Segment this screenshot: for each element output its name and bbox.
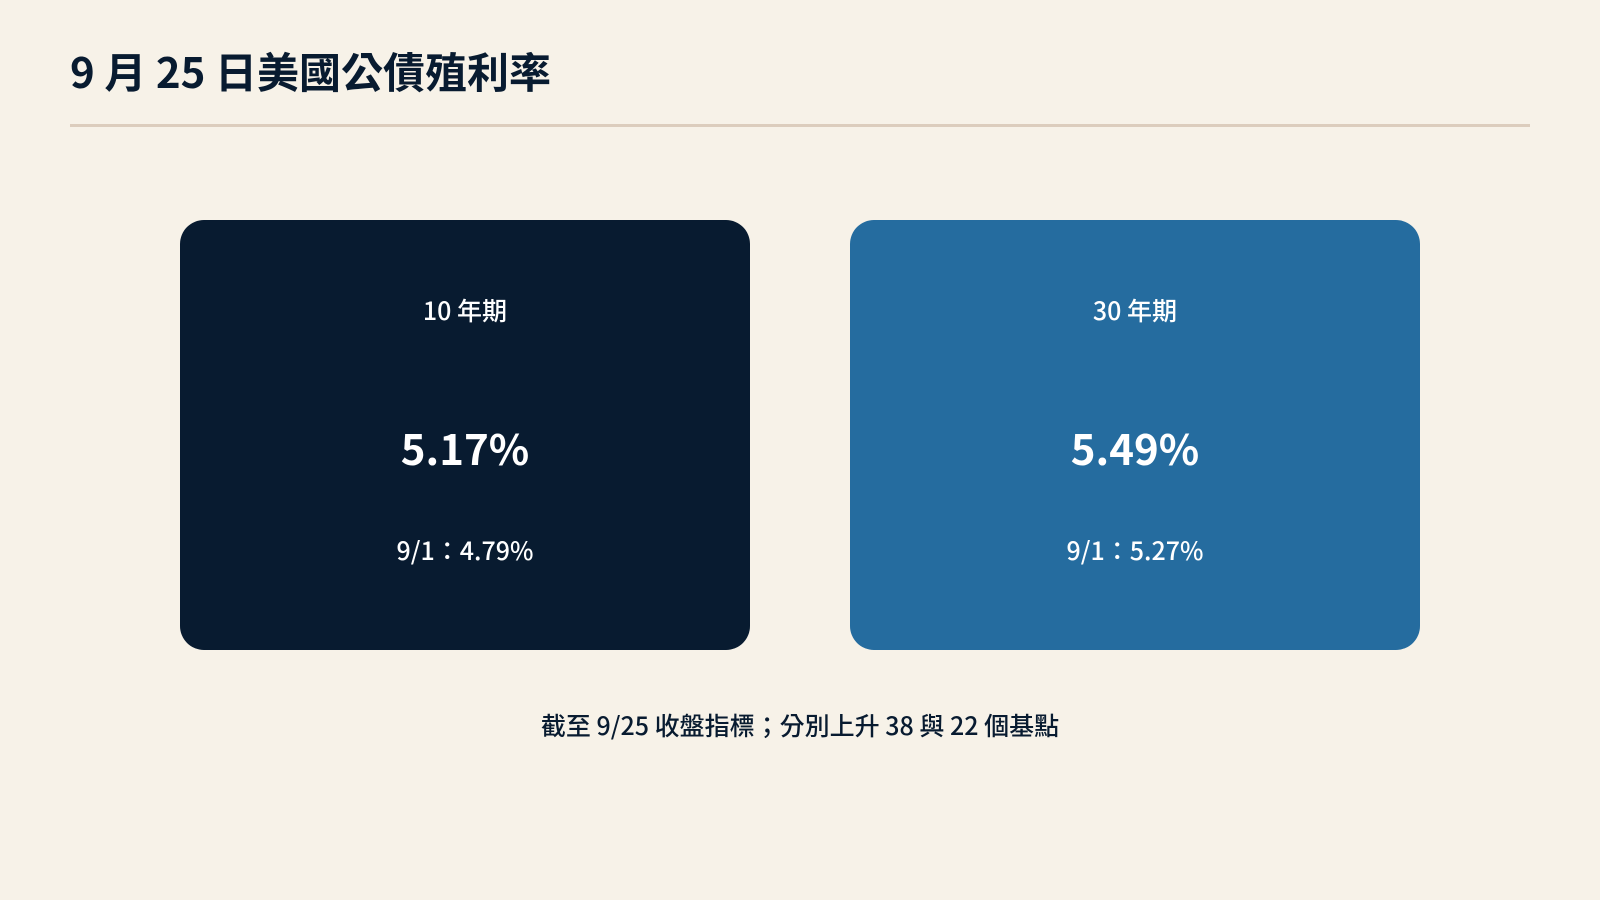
title: 9 月 25 日美國公債殖利率 (70, 40, 551, 101)
comparison: 9/1 value: 9/1：5.27% (1067, 532, 1203, 568)
label: 30 year: 30 年期 (1093, 292, 1177, 328)
panel: 10 year yield (180, 220, 750, 650)
panel: 30 year yield (850, 220, 1420, 650)
value: 5.17%: 5.17% (401, 417, 529, 478)
footnote: 截至 9/25 收盤指標；分別上升 38 與 22 個基點 (541, 707, 1059, 743)
label: 10 year: 10 年期 (423, 292, 507, 328)
comparison: 9/1 value: 9/1：4.79% (397, 532, 533, 568)
value: 5.49%: 5.49% (1071, 417, 1199, 478)
